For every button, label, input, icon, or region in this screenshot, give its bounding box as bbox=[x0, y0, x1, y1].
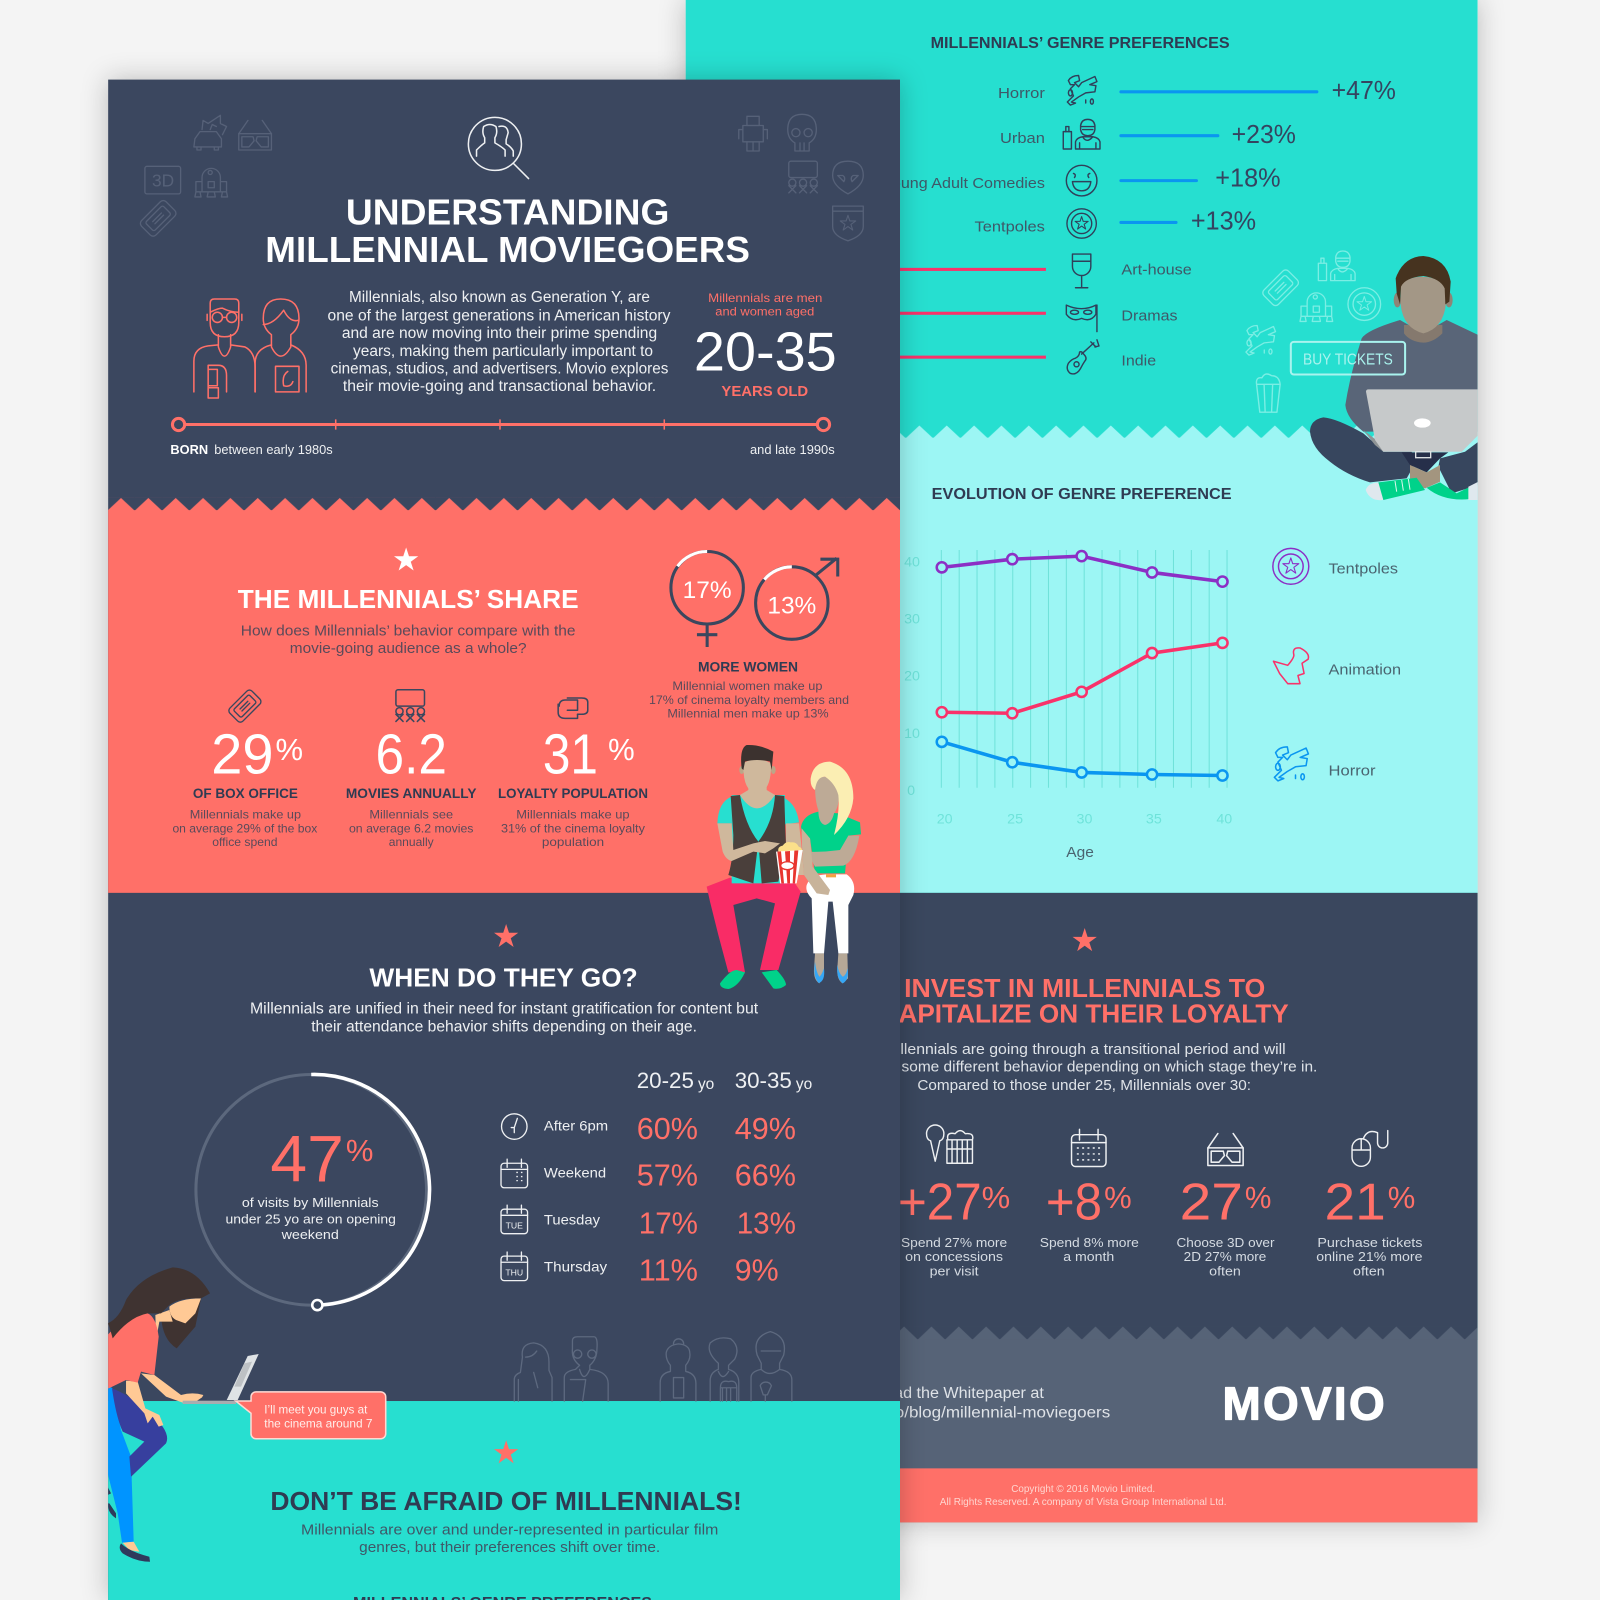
stat: loyalty population: Millennials make up bbox=[516, 807, 630, 821]
callout: age range bbox=[694, 291, 837, 400]
heading: invest in millennials bbox=[880, 975, 1289, 1028]
text block: more women: Millennial men make up 13% bbox=[667, 706, 829, 720]
stat: box office: Millennials make up bbox=[190, 807, 301, 821]
stat: box office bbox=[172, 689, 317, 849]
heading: evolution of genre preference: EVOLUTION OF GENRE PREFERENCE bbox=[932, 486, 1232, 503]
stat: spend per month: +8 bbox=[1046, 1173, 1102, 1231]
line chart: evolution: 30 bbox=[904, 611, 920, 627]
text block: invest intro: show some different behavior depending on which stage they’re in. bbox=[861, 1059, 1317, 1075]
chart: ring 47 percent: 47 bbox=[270, 1123, 344, 1197]
stat: online tickets: Purchase tickets bbox=[1317, 1235, 1423, 1250]
row: Indie bbox=[878, 340, 1156, 374]
stat: online tickets: often bbox=[1353, 1264, 1385, 1279]
table header bbox=[637, 1068, 812, 1093]
footer: copyright bbox=[940, 1484, 1227, 1508]
heading: genre preferences: MILLENNIALS’ GENRE PREFERENCES bbox=[931, 35, 1230, 52]
text block: when intro: Millennials are unified in their need for instant gratification for content but bbox=[250, 1000, 759, 1017]
chart: ring 47 percent bbox=[196, 1074, 430, 1310]
chart: female share bbox=[671, 552, 743, 647]
callout: age range: and women aged bbox=[715, 304, 814, 318]
stat: box office: office spend bbox=[212, 835, 278, 849]
stat: spend per month: Spend 8% more bbox=[1040, 1235, 1139, 1250]
stat: loyalty population: % bbox=[608, 733, 635, 767]
row: tuesday: Tuesday bbox=[544, 1212, 601, 1228]
table header: 20-25 bbox=[637, 1068, 694, 1093]
chart: female share: 17% bbox=[683, 577, 732, 604]
chart: ring 47 percent: under 25 yo are on opening bbox=[226, 1211, 396, 1226]
line chart: evolution: 0 bbox=[907, 783, 915, 799]
callout: age range: YEARS OLD bbox=[721, 384, 808, 400]
stat: online tickets: % bbox=[1388, 1181, 1415, 1215]
bar chart: genre preferences bbox=[878, 76, 1396, 374]
row: Young Adult Comedies: +18% bbox=[1215, 165, 1281, 193]
text block: when intro bbox=[250, 1000, 759, 1036]
stat: online tickets: 21 bbox=[1324, 1173, 1386, 1231]
series: Tentpoles bbox=[937, 551, 1228, 587]
stat: box office: % bbox=[276, 733, 303, 767]
title: UNDERSTANDING bbox=[346, 192, 669, 232]
man figure bbox=[707, 745, 804, 989]
text block: more women: MORE WOMEN bbox=[698, 659, 798, 674]
heading: don't be afraid: DON’T BE AFRAID OF MILLENNIALS! bbox=[270, 1486, 742, 1516]
icon: magnifier with people bbox=[468, 117, 529, 179]
title bbox=[265, 192, 750, 270]
series: Horror bbox=[937, 737, 1228, 781]
icon: star bbox=[494, 1440, 518, 1463]
stat: concessions: per visit bbox=[930, 1264, 979, 1279]
chart: ring 47 percent: % bbox=[346, 1134, 373, 1168]
stat: movies annually: MOVIES ANNUALLY bbox=[346, 786, 477, 801]
chart: male share bbox=[756, 558, 838, 639]
text block: whitepaper link: movio.co/blog/millennial-moviegoers bbox=[836, 1404, 1111, 1421]
heading: when do they go: WHEN DO THEY GO? bbox=[369, 963, 638, 993]
text block: whitepaper link bbox=[836, 1385, 1111, 1421]
chart: male share: 13% bbox=[767, 592, 816, 619]
row: Art-house: Art-house bbox=[1121, 262, 1192, 278]
callout: speech bubble: the cinema around 7 bbox=[264, 1418, 372, 1431]
callout: age range: Millennials are men bbox=[708, 291, 823, 305]
stat: movies annually bbox=[346, 690, 477, 849]
text block: invest intro bbox=[861, 1042, 1317, 1094]
timeline: born: and late 1990s bbox=[750, 442, 835, 457]
text block: share intro: How does Millennials’ behavior compare with the bbox=[241, 624, 576, 640]
line chart: evolution bbox=[904, 550, 1232, 861]
row: tuesday: 17% bbox=[639, 1207, 698, 1241]
callout: age range: 20-35 bbox=[694, 320, 837, 382]
footer: copyright: All Rights Reserved. A company of Vista Group International Ltd. bbox=[940, 1497, 1227, 1508]
text block: intro: Millennials, also known as Generation Y, are bbox=[349, 289, 650, 306]
row: after 6pm: After 6pm bbox=[544, 1119, 608, 1135]
row: weekend: Weekend bbox=[544, 1166, 606, 1182]
text block: intro bbox=[328, 289, 671, 395]
stat: spend per month: a month bbox=[1063, 1249, 1114, 1264]
line chart: evolution: 20 bbox=[904, 669, 920, 685]
row: Indie: Indie bbox=[1121, 353, 1156, 369]
stat: online tickets: online 21% more bbox=[1316, 1249, 1422, 1264]
stat: movies annually: on average 6.2 movies bbox=[349, 822, 473, 836]
stat: 3D: Choose 3D over bbox=[1177, 1235, 1275, 1250]
line chart: evolution: 25 bbox=[1007, 811, 1023, 827]
text block: more women: Millennial women make up bbox=[672, 679, 823, 693]
stat: online tickets bbox=[1316, 1131, 1423, 1279]
stat: concessions: +27 bbox=[898, 1173, 982, 1231]
line chart: evolution: 10 bbox=[904, 726, 920, 742]
stat: concessions: % bbox=[982, 1181, 1010, 1215]
heading: invest in millennials: CAPITALIZE ON THEIR LOYALTY bbox=[880, 1000, 1289, 1028]
row: weekend: 66% bbox=[735, 1159, 796, 1193]
legend bbox=[1273, 548, 1401, 781]
line chart: evolution: 35 bbox=[1146, 811, 1162, 827]
row: Young Adult Comedies bbox=[883, 165, 1281, 196]
row: Dramas: Dramas bbox=[1121, 308, 1178, 324]
text block: whitepaper link: Read the Whitepaper at bbox=[873, 1385, 1045, 1402]
stat: 3D bbox=[1177, 1134, 1275, 1279]
row: Horror bbox=[998, 76, 1396, 105]
row: thursday bbox=[501, 1252, 779, 1288]
decorative genre icons near man bbox=[1246, 251, 1381, 412]
illustration: man with laptop bbox=[1310, 256, 1478, 500]
text block: intro: years, making them particularly important to bbox=[353, 343, 653, 360]
stat: spend per month bbox=[1040, 1129, 1139, 1264]
row: after 6pm: 60% bbox=[637, 1112, 698, 1146]
row: Urban: Urban bbox=[1000, 131, 1045, 147]
row: after 6pm: 49% bbox=[735, 1112, 796, 1146]
text block: more women bbox=[649, 659, 849, 720]
row: tuesday: 13% bbox=[737, 1207, 796, 1241]
stat: box office: on average 29% of the box bbox=[172, 822, 317, 836]
popcorn box bbox=[776, 842, 803, 883]
table: attendance by age bbox=[501, 1068, 812, 1288]
panel: right infographic page bbox=[686, 0, 1478, 1522]
row: thursday: 11% bbox=[639, 1254, 698, 1288]
title: MILLENNIAL MOVIEGOERS bbox=[265, 230, 750, 270]
stat: loyalty population: 31 bbox=[543, 722, 598, 785]
line chart: evolution: 40 bbox=[904, 554, 920, 570]
heading: invest in millennials: INVEST IN MILLENNIALS TO bbox=[904, 975, 1265, 1003]
chart: ring 47 percent: of visits by Millennials bbox=[242, 1195, 379, 1210]
row: Tentpoles bbox=[974, 208, 1256, 238]
chart: ring 47 percent: weekend bbox=[281, 1227, 339, 1242]
illustration: couple with popcorn bbox=[707, 745, 861, 989]
stat: loyalty population bbox=[498, 698, 648, 849]
callout: speech bubble: I’ll meet you guys at bbox=[264, 1403, 368, 1416]
button: buy tickets bbox=[1291, 342, 1405, 374]
icon: star bbox=[1073, 928, 1097, 951]
text block: intro: their movie-going and transactional behavior. bbox=[343, 378, 656, 395]
text block: intro: cinemas, studios, and advertisers. Movio explores bbox=[331, 360, 669, 377]
row: Young Adult Comedies: Young Adult Comedies bbox=[883, 176, 1045, 192]
text block: more women: 17% of cinema loyalty members and bbox=[649, 693, 849, 707]
row: thursday: 9% bbox=[735, 1254, 779, 1288]
legend: Tentpoles: Tentpoles bbox=[1329, 561, 1398, 577]
text block: invest intro: Millennials are going through a transitional period and will bbox=[884, 1042, 1286, 1058]
text block: intro: and are now moving into their prime spending bbox=[342, 325, 657, 342]
legend: Animation bbox=[1273, 648, 1401, 684]
row: tuesday bbox=[501, 1205, 796, 1241]
text block: afraid intro: Millennials are over and under-represented in particular film bbox=[301, 1523, 718, 1539]
woman figure bbox=[801, 762, 861, 983]
logo: Movio: MOVIO bbox=[1222, 1377, 1385, 1429]
row: tuesday: TUE bbox=[506, 1221, 523, 1231]
text block: share intro bbox=[241, 624, 576, 657]
text block: afraid intro bbox=[301, 1523, 718, 1556]
timeline: born bbox=[170, 418, 835, 457]
series: Animation bbox=[937, 638, 1228, 718]
row: Urban: +23% bbox=[1232, 121, 1296, 149]
row: Tentpoles: Tentpoles bbox=[974, 220, 1045, 236]
timeline: born: between early 1980s bbox=[214, 442, 333, 457]
row: weekend: 57% bbox=[637, 1159, 698, 1193]
legend: Horror bbox=[1274, 747, 1376, 781]
line chart: evolution: 20 bbox=[937, 811, 953, 827]
heading: the millennials share: THE MILLENNIALS’ SHARE bbox=[238, 584, 579, 614]
callout: speech bubble bbox=[236, 1392, 386, 1439]
legend: Tentpoles bbox=[1273, 548, 1398, 584]
icon: star bbox=[394, 547, 418, 571]
text block: invest intro: Compared to those under 25, Millennials over 30: bbox=[917, 1078, 1251, 1094]
line chart: evolution: 30 bbox=[1077, 811, 1092, 827]
text block: when intro: their attendance behavior shifts depending on their age. bbox=[311, 1019, 697, 1036]
row: weekend bbox=[501, 1159, 796, 1193]
row: Horror: +47% bbox=[1332, 77, 1396, 105]
stat: movies annually: annually bbox=[389, 835, 435, 849]
stat: loyalty population: LOYALTY POPULATION bbox=[498, 786, 648, 801]
icon: coral couple outline bbox=[194, 299, 306, 398]
footer: copyright: Copyright © 2016 Movio Limited. bbox=[1011, 1484, 1155, 1495]
axis label: age: Age bbox=[1066, 845, 1094, 861]
row: Dramas bbox=[878, 305, 1178, 332]
row: after 6pm bbox=[502, 1112, 796, 1146]
stat: 3D: often bbox=[1209, 1264, 1241, 1279]
timeline: born: BORN bbox=[170, 442, 208, 457]
icon: star bbox=[494, 924, 518, 947]
stat: concessions: Spend 27% more bbox=[901, 1235, 1007, 1250]
row: Art-house bbox=[878, 254, 1192, 288]
table header: 30-35 bbox=[735, 1068, 792, 1093]
illustration: woman with laptop bbox=[108, 1267, 259, 1562]
stat: loyalty population: 31% of the cinema loyalty bbox=[501, 822, 646, 836]
table header: yo bbox=[698, 1076, 714, 1093]
stat: movies annually: Millennials see bbox=[369, 807, 453, 821]
stat: loyalty population: population bbox=[542, 835, 604, 849]
stat: box office: 29 bbox=[211, 722, 273, 785]
stat: box office: OF BOX OFFICE bbox=[193, 786, 298, 801]
stat: concessions bbox=[898, 1125, 1010, 1279]
stat: concessions: on concessions bbox=[905, 1249, 1003, 1264]
panel: left infographic page bbox=[108, 80, 900, 1600]
decorative movie icons: 3D bbox=[152, 171, 174, 191]
text block: afraid intro: genres, but their preferences shift over time. bbox=[359, 1540, 660, 1556]
stat: spend per month: % bbox=[1104, 1181, 1132, 1215]
row: Horror: Horror bbox=[998, 86, 1045, 102]
stat: 3D: 27 bbox=[1180, 1173, 1243, 1231]
legend: Horror: Horror bbox=[1329, 764, 1376, 780]
legend: Animation: Animation bbox=[1329, 662, 1401, 678]
row: thursday: THU bbox=[505, 1268, 523, 1278]
text block: intro: one of the largest generations in American history bbox=[328, 307, 671, 324]
stat: movies annually: 6.2 bbox=[376, 722, 447, 785]
line chart: evolution: 40 bbox=[1216, 811, 1232, 827]
decorative movie icons bbox=[139, 114, 863, 241]
table header: yo bbox=[796, 1076, 812, 1093]
stat: 3D: 2D 27% more bbox=[1184, 1249, 1266, 1264]
text block: share intro: movie-going audience as a whole? bbox=[290, 641, 527, 657]
illustration: outlined audience bbox=[514, 1332, 792, 1401]
stat: 3D: % bbox=[1245, 1181, 1271, 1215]
row: thursday: Thursday bbox=[544, 1259, 608, 1275]
row: Tentpoles: +13% bbox=[1191, 208, 1256, 236]
row: Urban bbox=[1000, 119, 1296, 149]
button: buy tickets: BUY TICKETS bbox=[1303, 351, 1393, 368]
